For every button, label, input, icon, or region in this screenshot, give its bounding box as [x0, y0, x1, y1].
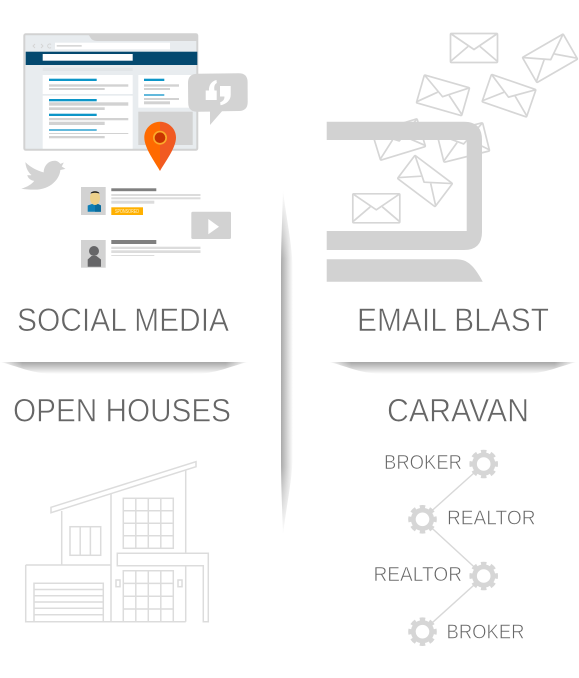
heading: email blast: EMAIL BLAST: [357, 302, 549, 338]
sponsored profile card: [81, 187, 200, 215]
envelopes: [353, 34, 578, 223]
gear: realtor upper: [410, 507, 435, 532]
heading: open houses: OPEN HOUSES: [13, 392, 231, 428]
browser window: [24, 34, 197, 150]
heading: social media: SOCIAL MEDIA: [17, 302, 230, 338]
laptop base: [327, 259, 483, 282]
icon: twitter bird: [21, 161, 65, 190]
gear: broker top: [471, 451, 496, 477]
profile card: [81, 240, 200, 268]
gear: broker bottom: [410, 619, 435, 644]
heading: caravan: CARAVAN: [387, 392, 529, 428]
label: realtor: REALTOR: [447, 508, 536, 530]
gear: realtor lower: [471, 563, 496, 589]
horizontal divider shadow left: [0, 362, 248, 375]
icon: speech bubble: [188, 73, 248, 125]
vertical divider shadow: [280, 190, 294, 535]
label: broker: BROKER: [384, 452, 462, 474]
label: broker: BROKER: [446, 622, 524, 644]
icon: map pin: [144, 122, 176, 171]
panel: email blast illustration: [327, 34, 578, 282]
label: realtor: REALTOR: [374, 564, 462, 586]
horizontal divider shadow right: [329, 362, 577, 375]
house illustration: [26, 462, 208, 622]
sponsored badge: SPONSORED: [115, 209, 139, 215]
connector lines: [422, 464, 484, 632]
icon: video play: [191, 212, 231, 239]
panel: social media illustration: [21, 34, 248, 268]
caravan network diagram: [374, 451, 536, 644]
laptop screen frame: [327, 122, 482, 250]
